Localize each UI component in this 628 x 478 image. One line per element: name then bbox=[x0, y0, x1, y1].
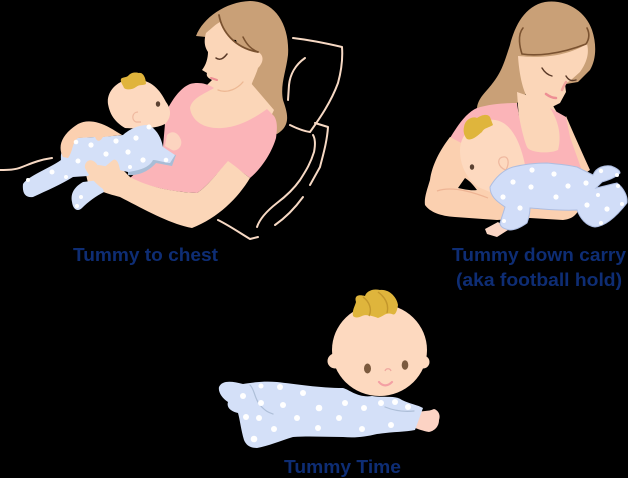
mother facial details bbox=[211, 15, 258, 91]
baby head bbox=[332, 304, 427, 396]
baby hand bbox=[165, 132, 181, 150]
onesie shadow bbox=[128, 150, 176, 175]
onesie dots bbox=[26, 124, 168, 208]
mother lower arm bbox=[84, 161, 250, 228]
mother hair bbox=[477, 2, 595, 108]
nose bbox=[385, 369, 391, 371]
baby onesie bbox=[23, 125, 175, 197]
panel: tummy to chest illustration bbox=[0, 1, 342, 239]
panel: tummy down carry illustration bbox=[425, 2, 627, 237]
heading: tummy time label: Tummy Time bbox=[284, 456, 401, 477]
baby head bbox=[108, 79, 170, 129]
mother shirt bbox=[450, 103, 581, 176]
baby hair bbox=[121, 72, 146, 89]
mother facial details bbox=[519, 28, 589, 98]
mother upper hand bbox=[61, 121, 122, 158]
onesie dots bbox=[240, 384, 411, 442]
heading: tummy to chest label: Tummy to chest bbox=[73, 244, 218, 265]
ears bbox=[328, 354, 342, 368]
heading: tummy down carry label: Tummy down carry bbox=[452, 244, 627, 265]
onesie dots bbox=[500, 167, 624, 225]
baby eye bbox=[470, 164, 474, 170]
baby ear bbox=[499, 157, 508, 170]
heading: tummy down carry label bbox=[452, 244, 627, 290]
pillow outlines bbox=[0, 38, 342, 239]
baby onesie bbox=[219, 382, 423, 448]
baby in tummy down carry bbox=[458, 115, 627, 237]
arm crease bbox=[437, 189, 488, 198]
baby hand bbox=[415, 409, 440, 432]
baby onesie bbox=[490, 163, 627, 230]
mother neck and chest skin bbox=[182, 80, 274, 138]
mother hair back bbox=[196, 1, 288, 134]
baby eye bbox=[156, 101, 160, 107]
hair strands bbox=[363, 292, 388, 316]
baby head bbox=[460, 120, 525, 192]
mother shirt bbox=[130, 83, 277, 193]
onesie fold lines bbox=[250, 385, 414, 414]
baby hair bbox=[353, 289, 398, 318]
eyes bbox=[364, 364, 371, 374]
mother face bbox=[518, 44, 588, 108]
baby in tummy to chest bbox=[23, 72, 181, 210]
mouth bbox=[379, 382, 392, 385]
mother neck and chest skin bbox=[517, 92, 564, 160]
baby mouth gap bbox=[458, 178, 477, 190]
baby back leg bbox=[72, 180, 104, 210]
heading: tummy down carry label: (aka football hold) bbox=[456, 269, 622, 290]
baby hair bbox=[464, 115, 493, 139]
baby foot hand bbox=[485, 222, 508, 237]
panel: tummy time baby illustration bbox=[219, 289, 440, 448]
mother face bbox=[202, 22, 262, 100]
mother near arm bbox=[425, 137, 580, 220]
mother far arm bbox=[566, 116, 590, 178]
mother lower hand bbox=[85, 160, 128, 195]
baby ear bbox=[133, 112, 141, 122]
